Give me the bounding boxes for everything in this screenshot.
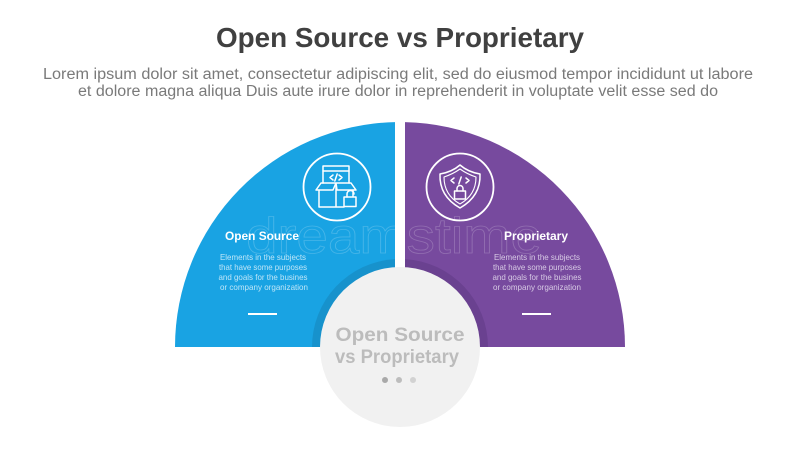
description: proprietary: Elements in the subjects <box>494 253 580 262</box>
center label: vs Proprietary <box>335 346 459 368</box>
purple quarter wedge <box>405 122 625 347</box>
description: open source: Elements in the subjects <box>220 253 306 262</box>
pagination dots <box>382 377 416 383</box>
heading: proprietary: Proprietary <box>504 231 569 243</box>
subtitle text block <box>43 66 753 100</box>
icon: open box with code window and open padlock <box>304 154 370 220</box>
description: open source: or company organization <box>220 283 308 292</box>
dash: proprietary <box>522 313 551 315</box>
subtitle text block: et dolore magna aliqua Duis aute irure dolor in reprehenderit in voluptate velit esse sed do <box>78 83 718 100</box>
panel: open source <box>175 122 395 347</box>
center label: Open Source <box>336 324 465 346</box>
watermark: dreamstime <box>246 208 542 264</box>
description: proprietary: or company organization <box>493 283 581 292</box>
center circle <box>320 267 480 427</box>
title: Open Source vs Proprietary <box>216 22 584 53</box>
description: proprietary: that have some purposes <box>493 263 581 272</box>
panel: proprietary <box>405 122 625 347</box>
heading: open source: Open Source <box>225 231 299 243</box>
subtitle text block: Lorem ipsum dolor sit amet, consectetur adipiscing elit, sed do eiusmod tempor incididunt ut labore <box>43 66 753 83</box>
description: proprietary <box>492 253 582 292</box>
description: proprietary: and goals for the busines <box>492 273 582 282</box>
blue inner ring <box>312 259 395 347</box>
dash: open source <box>248 313 277 315</box>
description: open source: and goals for the busines <box>218 273 308 282</box>
description: open source <box>218 253 308 292</box>
center label <box>335 324 465 368</box>
blue quarter wedge <box>175 122 395 347</box>
purple inner ring <box>405 259 488 347</box>
description: open source: that have some purposes <box>219 263 307 272</box>
icon: shield with code and padlock <box>426 154 494 220</box>
